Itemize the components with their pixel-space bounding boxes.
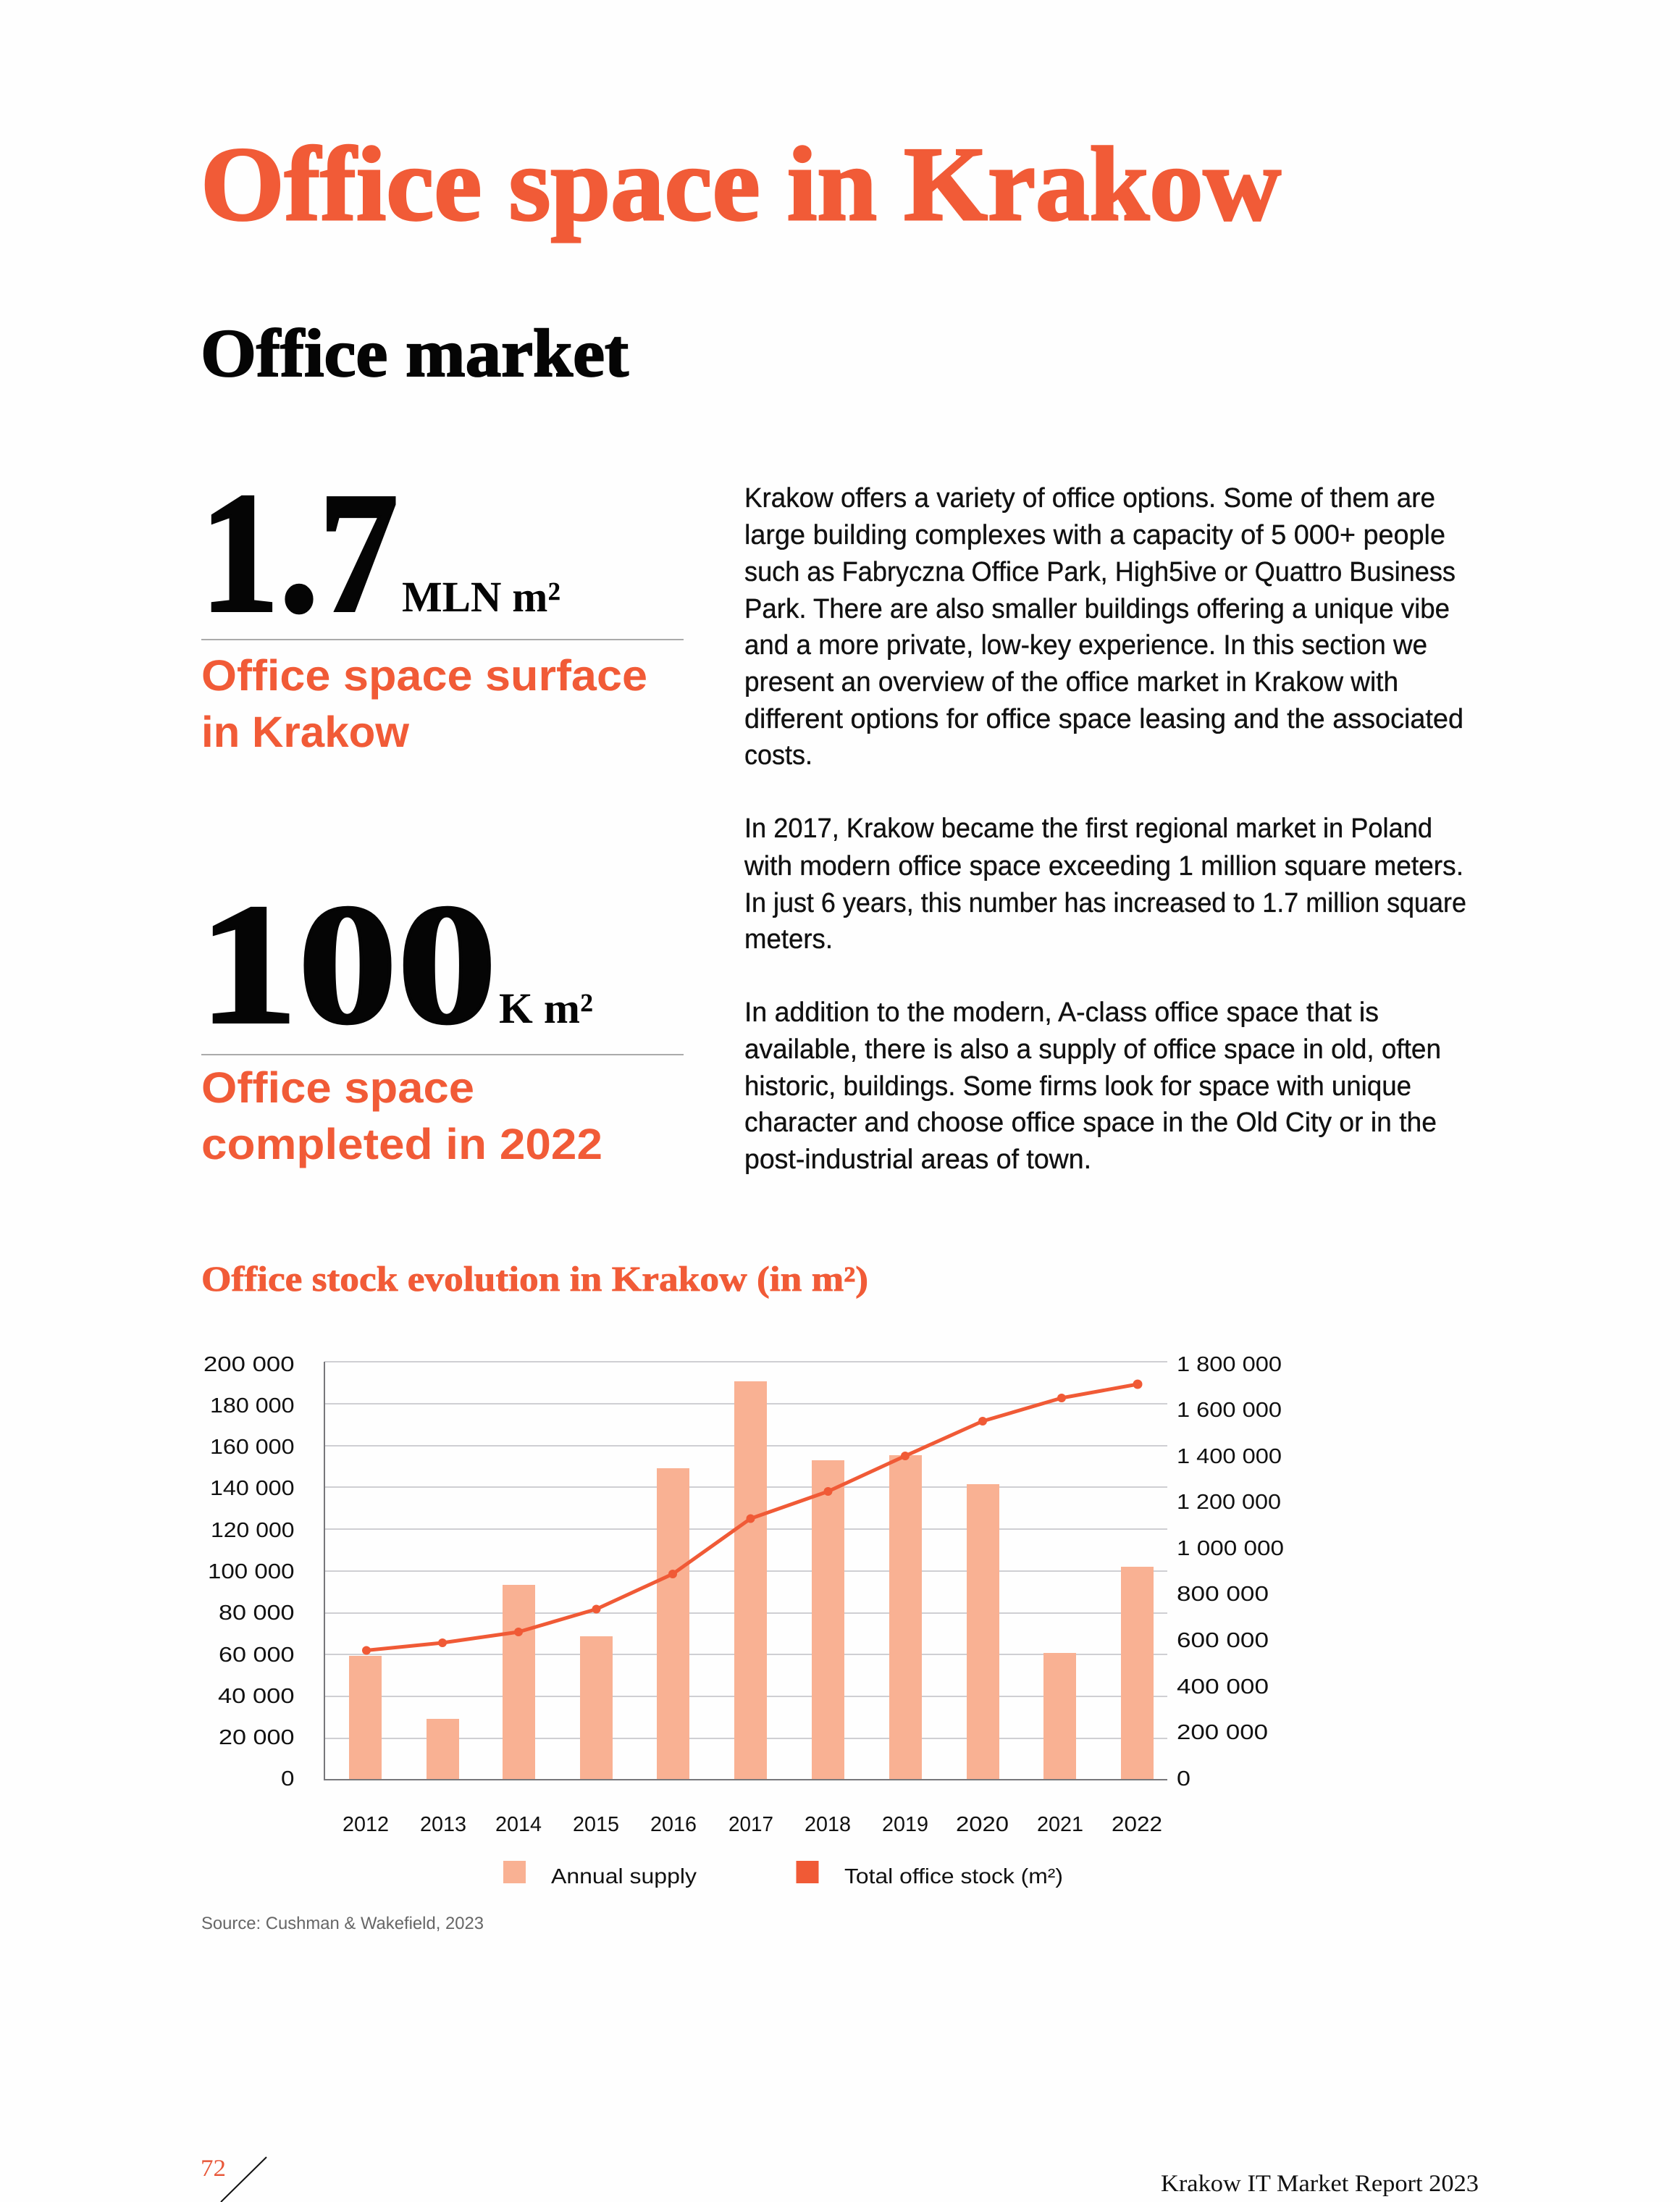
body text: such as Fabryczna Office Park, High5ive or Quattro Business (744, 557, 1456, 587)
right axis labels: 400 000 (1177, 1675, 1269, 1699)
x axis labels (343, 1813, 1162, 1836)
body text: Krakow offers a variety of office options. Some of them are (744, 483, 1435, 514)
left axis labels: 80 000 (219, 1602, 294, 1625)
x axis labels: 2021 (1037, 1813, 1083, 1836)
body text: historic, buildings. Some firms look for space with unique (744, 1071, 1411, 1102)
left axis labels (203, 1353, 294, 1791)
source note: Source: Cushman & Wakefield, 2023 (201, 1914, 484, 1933)
x axis labels: 2020 (956, 1813, 1009, 1836)
stat caption (201, 1063, 602, 1168)
chart: office stock evolution (203, 1353, 1284, 1888)
x axis labels: 2012 (343, 1813, 389, 1836)
body text: with modern office space exceeding 1 million square meters. (744, 851, 1463, 882)
body text: costs. (744, 740, 812, 771)
stat caption: Office space surface (201, 651, 647, 700)
right axis labels: 200 000 (1177, 1721, 1268, 1744)
stat unit MLN m2: MLN m² (402, 573, 560, 621)
right axis labels (1177, 1353, 1284, 1791)
body text: large building complexes with a capacity of 5 000+ people (744, 520, 1445, 550)
bars: annual supply (349, 1381, 1154, 1780)
right axis labels: 1 400 000 (1177, 1445, 1282, 1468)
stat unit K m2: K m² (499, 984, 593, 1032)
stat caption: in Krakow (201, 708, 409, 756)
axes (324, 1362, 1167, 1780)
x axis labels: 2013 (420, 1813, 466, 1836)
left axis labels: 60 000 (219, 1644, 294, 1667)
right axis labels: 1 600 000 (1177, 1399, 1282, 1422)
left axis labels: 200 000 (203, 1353, 294, 1376)
footer report name: Krakow IT Market Report 2023 (1161, 2171, 1479, 2197)
body text: In just 6 years, this number has increased to 1.7 million square (744, 888, 1466, 918)
left axis labels: 40 000 (218, 1685, 294, 1708)
body text: present an overview of the office market in Krakow with (744, 667, 1398, 698)
stat: office space surface (200, 458, 684, 756)
left axis labels: 160 000 (210, 1436, 294, 1459)
body text: available, there is also a supply of office space in old, often (744, 1034, 1441, 1065)
right axis labels: 800 000 (1177, 1583, 1269, 1606)
body text: In addition to the modern, A-class office space that is (744, 997, 1379, 1028)
stat value 1.7: 1.7 (200, 458, 398, 648)
legend: total office stock: Total office stock (m²) (844, 1865, 1063, 1888)
stat caption: completed in 2022 (201, 1120, 602, 1168)
legend: annual supply (503, 1861, 697, 1888)
right axis labels: 0 (1177, 1767, 1190, 1791)
legend (503, 1861, 1063, 1888)
x axis labels: 2016 (650, 1813, 697, 1836)
left axis labels: 180 000 (210, 1394, 294, 1418)
x axis labels: 2015 (573, 1813, 619, 1836)
body text: Park. There are also smaller buildings offering a unique vibe (744, 594, 1450, 624)
right axis labels: 1 000 000 (1177, 1537, 1284, 1560)
left axis labels: 20 000 (219, 1726, 294, 1749)
left axis labels: 100 000 (208, 1560, 294, 1583)
stat caption: Office space (201, 1063, 474, 1112)
legend: annual supply: Annual supply (551, 1865, 697, 1888)
stat value 100: 100 (198, 869, 497, 1060)
x axis labels: 2018 (805, 1813, 851, 1836)
stat: office space completed (198, 869, 684, 1168)
line: total office stock (362, 1379, 1143, 1654)
chart title: Office stock evolution in Krakow (in m²) (201, 1259, 868, 1299)
body text: post-industrial areas of town. (744, 1144, 1091, 1175)
body text: character and choose office space in the Old City or in the (744, 1108, 1437, 1138)
right axis labels: 1 800 000 (1177, 1353, 1282, 1376)
footer slash (221, 2157, 266, 2202)
x axis labels: 2019 (882, 1813, 928, 1836)
body text: meters. (744, 924, 833, 955)
x axis labels: 2014 (495, 1813, 542, 1836)
right axis labels: 600 000 (1177, 1629, 1269, 1652)
legend: total office stock (797, 1861, 1063, 1888)
x axis labels: 2022 (1112, 1813, 1162, 1836)
body text: and a more private, low-key experience. In this section we (744, 630, 1427, 661)
body text (744, 483, 1466, 1175)
page number: 72 (201, 2156, 226, 2182)
left axis labels: 120 000 (211, 1519, 294, 1542)
right axis labels: 1 200 000 (1177, 1491, 1281, 1514)
stat caption (201, 651, 647, 756)
left axis labels: 140 000 (210, 1477, 294, 1500)
body text: different options for office space leasing and the associated (744, 704, 1463, 734)
x axis labels: 2017 (728, 1813, 773, 1836)
body text: In 2017, Krakow became the first regional market in Poland (744, 813, 1432, 844)
grid lines (324, 1362, 1167, 1738)
title: Office space in Krakow (201, 125, 1281, 243)
left axis labels: 0 (281, 1767, 294, 1791)
heading: office market: Office market (201, 316, 629, 391)
